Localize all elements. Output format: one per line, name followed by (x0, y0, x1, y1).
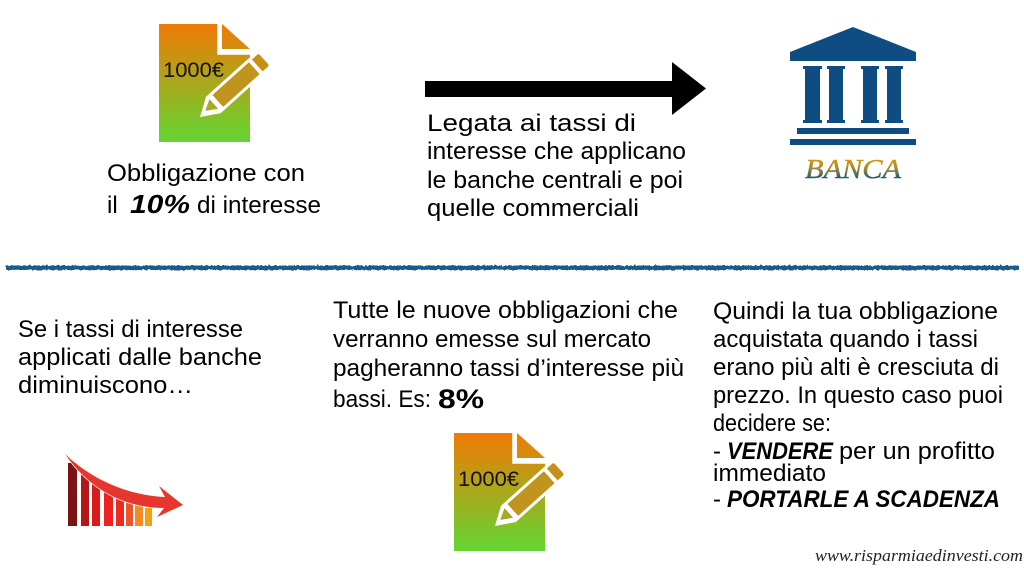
divider (6, 266, 1019, 270)
text: new bonds pay lower rates: verranno emesse sul mercato (333, 326, 651, 353)
text: bond with 10% interest: 10% (130, 189, 190, 219)
icon: new bond document 1000€ (454, 433, 568, 551)
text: your bond has grown in price: VENDERE (727, 438, 834, 465)
icon: bond document 1000€ (159, 24, 273, 142)
text: bond with 10% interest: il (107, 192, 118, 219)
text: if rates decrease (18, 316, 262, 399)
text: if rates decrease: Se i tassi di interesse (18, 316, 243, 343)
text: if rates decrease: diminuiscono… (18, 372, 193, 399)
text: new bonds pay lower rates: Tutte le nuove obbligazioni che (333, 297, 678, 324)
text: linked to central bank rates: interesse che applicano (427, 138, 686, 165)
text: bond with 10% interest: di interesse (197, 192, 321, 219)
icon: falling rates chart (65, 454, 183, 526)
text: bond with 10% interest: Obbligazione con (107, 160, 305, 187)
icon: bank (790, 27, 916, 184)
icon: bond document 1000€: 1000€ (163, 59, 224, 82)
text: your bond has grown in price: prezzo. In questo caso puoi (713, 382, 1003, 409)
text: your bond has grown in price: PORTARLE A SCADENZA (727, 486, 1000, 513)
text: your bond has grown in price: immediato (713, 460, 826, 487)
icon: new bond document 1000€: 1000€ (458, 468, 519, 491)
text: your bond has grown in price (713, 298, 1003, 513)
text: linked to central bank rates: Legata ai tassi di (427, 110, 636, 137)
text: linked to central bank rates: le banche centrali e poi (427, 167, 683, 194)
text: linked to central bank rates: quelle commerciali (427, 195, 639, 222)
text: your bond has grown in price: - (713, 486, 721, 513)
text: new bonds pay lower rates: bassi. Es: (333, 386, 431, 413)
arrow: bond linked to bank rates (425, 62, 706, 115)
text: bond with 10% interest (107, 160, 321, 219)
text: if rates decrease: applicati dalle banche (18, 344, 262, 371)
text: your bond has grown in price: - (713, 438, 721, 465)
text: new bonds pay lower rates: pagheranno tassi d’interesse più (333, 355, 684, 382)
text: your bond has grown in price: decidere se: (713, 410, 831, 437)
text: new bonds pay lower rates: 8% (438, 384, 484, 414)
text: linked to central bank rates (427, 110, 686, 222)
text: your bond has grown in price: acquistata quando i tassi (713, 326, 978, 353)
text: your bond has grown in price: Quindi la tua obbligazione (713, 298, 998, 325)
label: BANCA: BANCA (805, 154, 902, 184)
text: your bond has grown in price: erano più alti è cresciuta di (713, 354, 999, 381)
website credit: www.risparmiaedinvesti.com (815, 546, 1023, 565)
text: your bond has grown in price: per un profitto (839, 438, 995, 465)
text: new bonds pay lower rates (333, 297, 684, 414)
